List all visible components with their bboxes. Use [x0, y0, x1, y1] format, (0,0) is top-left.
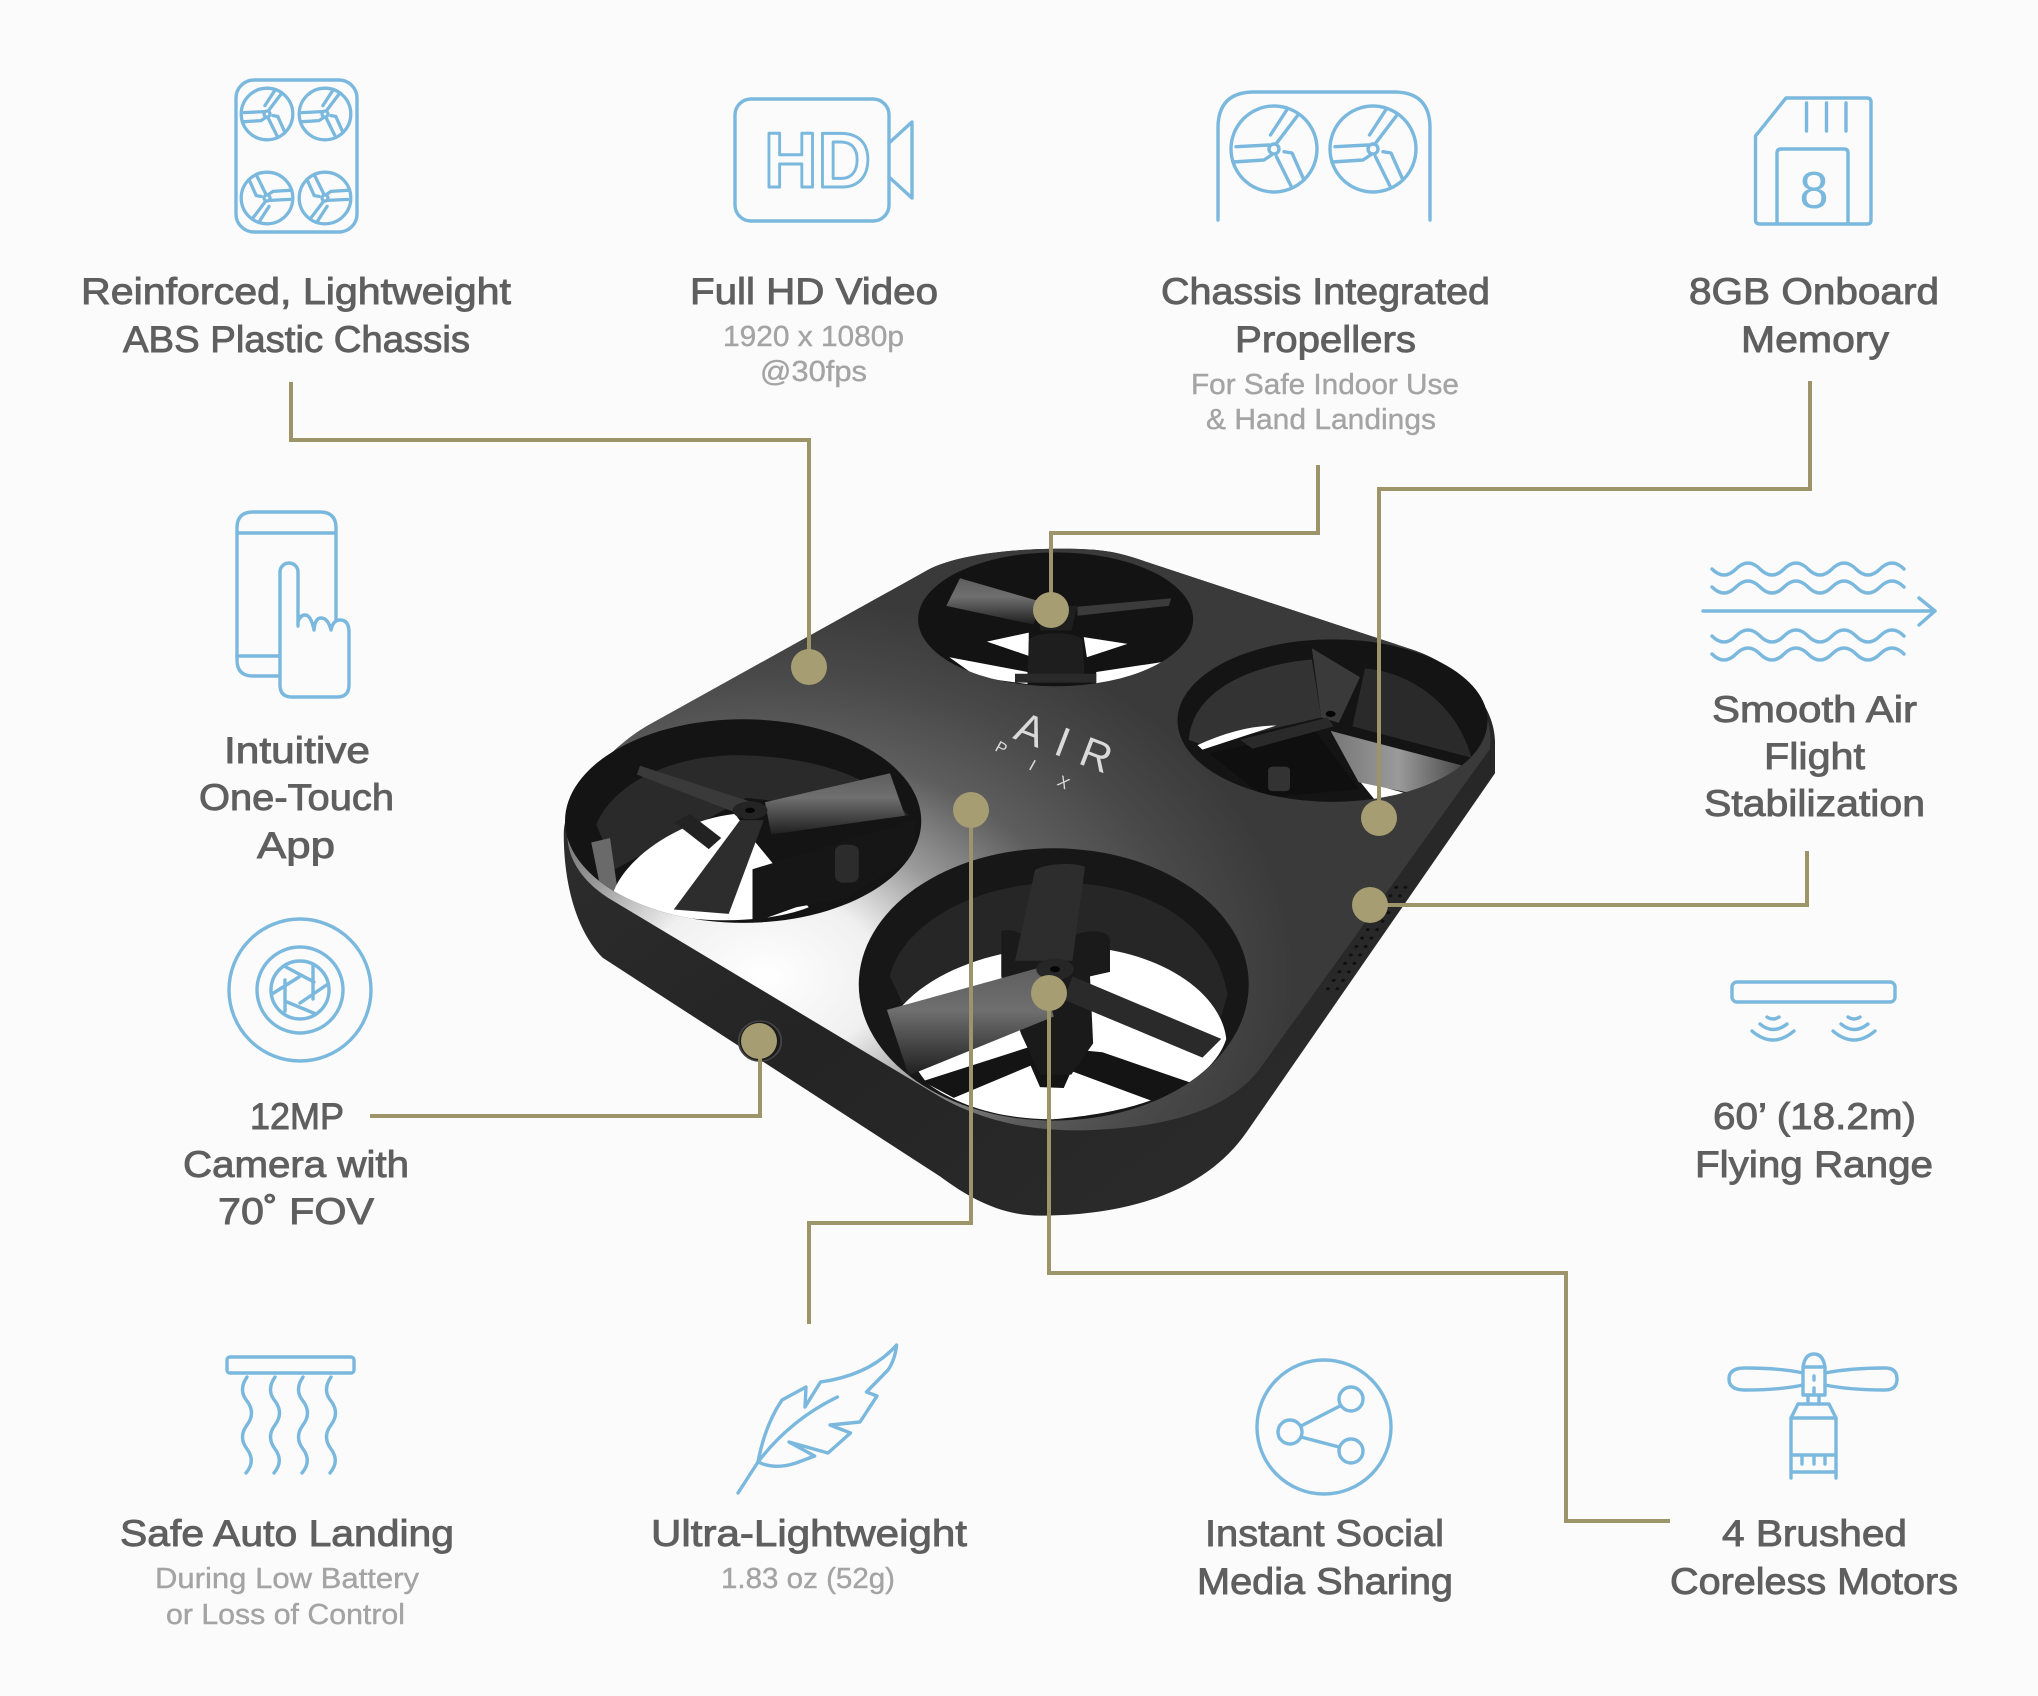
panel: app — [199, 512, 394, 866]
drone body — [564, 549, 1495, 1216]
icon: camera aperture — [229, 919, 371, 1061]
connector dots — [741, 592, 1397, 1059]
icon: feather — [738, 1345, 897, 1493]
icon: share — [1257, 1360, 1391, 1494]
connector: camera — [370, 1041, 760, 1116]
connector: motors — [1049, 993, 1670, 1521]
detail: landing — [155, 1563, 420, 1631]
icon: HD camera: HD — [764, 116, 871, 204]
heading: stabilization — [1704, 689, 1925, 824]
logo word PIX: PIX — [992, 739, 1096, 807]
drone logo — [992, 703, 1119, 807]
panel: landing — [120, 1357, 454, 1631]
heading: camera: Camera with — [183, 1144, 409, 1185]
left propeller well — [565, 719, 921, 923]
icon: auto landing — [227, 1357, 354, 1473]
detail: propellers — [1191, 369, 1459, 436]
heading: camera: 12MP — [250, 1096, 344, 1137]
panel: video — [690, 99, 938, 388]
connector: lightweight — [809, 810, 971, 1324]
connector: memory — [1379, 381, 1810, 818]
heading: range: Flying Range — [1695, 1144, 1933, 1185]
heading: propellers — [1161, 271, 1490, 360]
right propeller well — [1178, 639, 1488, 803]
heading: motors — [1670, 1513, 1958, 1602]
icon: flying range — [1732, 982, 1895, 1040]
connector: stabilization — [1370, 851, 1807, 905]
drone photo — [564, 549, 1495, 1216]
icon: drone chassis — [236, 80, 357, 232]
heading: stabilization: Flight — [1764, 736, 1866, 777]
detail: video — [723, 321, 904, 388]
connector lines — [291, 381, 1810, 1521]
icon: air flow — [1703, 563, 1935, 660]
icon: memory card — [1756, 98, 1871, 224]
panel: memory — [1689, 98, 1939, 360]
heading: app: Intuitive — [224, 730, 370, 771]
detail: landing: or Loss of Control — [166, 1599, 405, 1631]
heading: app: One-Touch — [199, 777, 394, 818]
logo word AIR: AIR — [1009, 703, 1119, 782]
panel: stabilization — [1703, 563, 1935, 824]
icon: HD camera — [735, 99, 912, 221]
heading: camera: 70˚ FOV — [218, 1191, 374, 1232]
heading: lightweight: Ultra-Lightweight — [651, 1513, 968, 1554]
heading: memory: Memory — [1741, 319, 1890, 360]
heading: memory — [1689, 271, 1939, 360]
heading: landing: Safe Auto Landing — [120, 1513, 454, 1554]
panel: motors — [1670, 1354, 1958, 1602]
icon: integrated propellers — [1218, 92, 1430, 220]
panel: chassis — [81, 80, 512, 360]
heading: range — [1695, 1096, 1933, 1185]
heading: range: 60’ (18.2m) — [1713, 1096, 1916, 1137]
icon: phone and hand — [237, 512, 349, 697]
heading: sharing: Instant Social — [1205, 1513, 1444, 1554]
heading: chassis: Reinforced, Lightweight — [81, 271, 512, 312]
heading: memory: 8GB Onboard — [1689, 271, 1939, 312]
bottom propeller well — [859, 848, 1249, 1121]
heading: chassis: ABS Plastic Chassis — [123, 319, 470, 360]
heading: stabilization: Stabilization — [1704, 783, 1925, 824]
heading: sharing: Media Sharing — [1197, 1561, 1453, 1602]
heading: motors: 4 Brushed — [1722, 1513, 1907, 1554]
detail: video: @30fps — [760, 356, 867, 388]
heading: propellers: Chassis Integrated — [1161, 271, 1490, 312]
heading: app — [199, 730, 394, 866]
detail: video: 1920 x 1080p — [723, 321, 904, 353]
heading: sharing — [1197, 1513, 1453, 1602]
panel: camera — [183, 919, 409, 1232]
heading: chassis — [81, 271, 512, 360]
detail: propellers: For Safe Indoor Use — [1191, 369, 1459, 401]
detail: propellers: & Hand Landings — [1206, 404, 1436, 436]
detail: landing: During Low Battery — [155, 1563, 420, 1595]
heading: stabilization: Smooth Air — [1712, 689, 1917, 730]
icon: motor — [1729, 1354, 1897, 1478]
speaker grille — [1324, 887, 1406, 994]
panel: lightweight — [651, 1345, 968, 1595]
heading: app: App — [257, 825, 335, 866]
camera lens — [739, 1021, 781, 1061]
heading: motors: Coreless Motors — [1670, 1561, 1958, 1602]
heading: video: Full HD Video — [690, 271, 938, 312]
heading: camera — [183, 1096, 409, 1232]
detail: lightweight: 1.83 oz (52g) — [721, 1563, 895, 1595]
drone top plate — [567, 549, 1491, 1130]
panel: range — [1695, 982, 1933, 1185]
connector: propellers — [1051, 465, 1318, 610]
panel: sharing — [1197, 1360, 1453, 1602]
top propeller well — [918, 552, 1193, 686]
panel: propellers — [1161, 92, 1490, 436]
icon: memory card: 8 — [1800, 162, 1828, 220]
connector: chassis — [291, 382, 809, 667]
heading: propellers: Propellers — [1235, 319, 1416, 360]
